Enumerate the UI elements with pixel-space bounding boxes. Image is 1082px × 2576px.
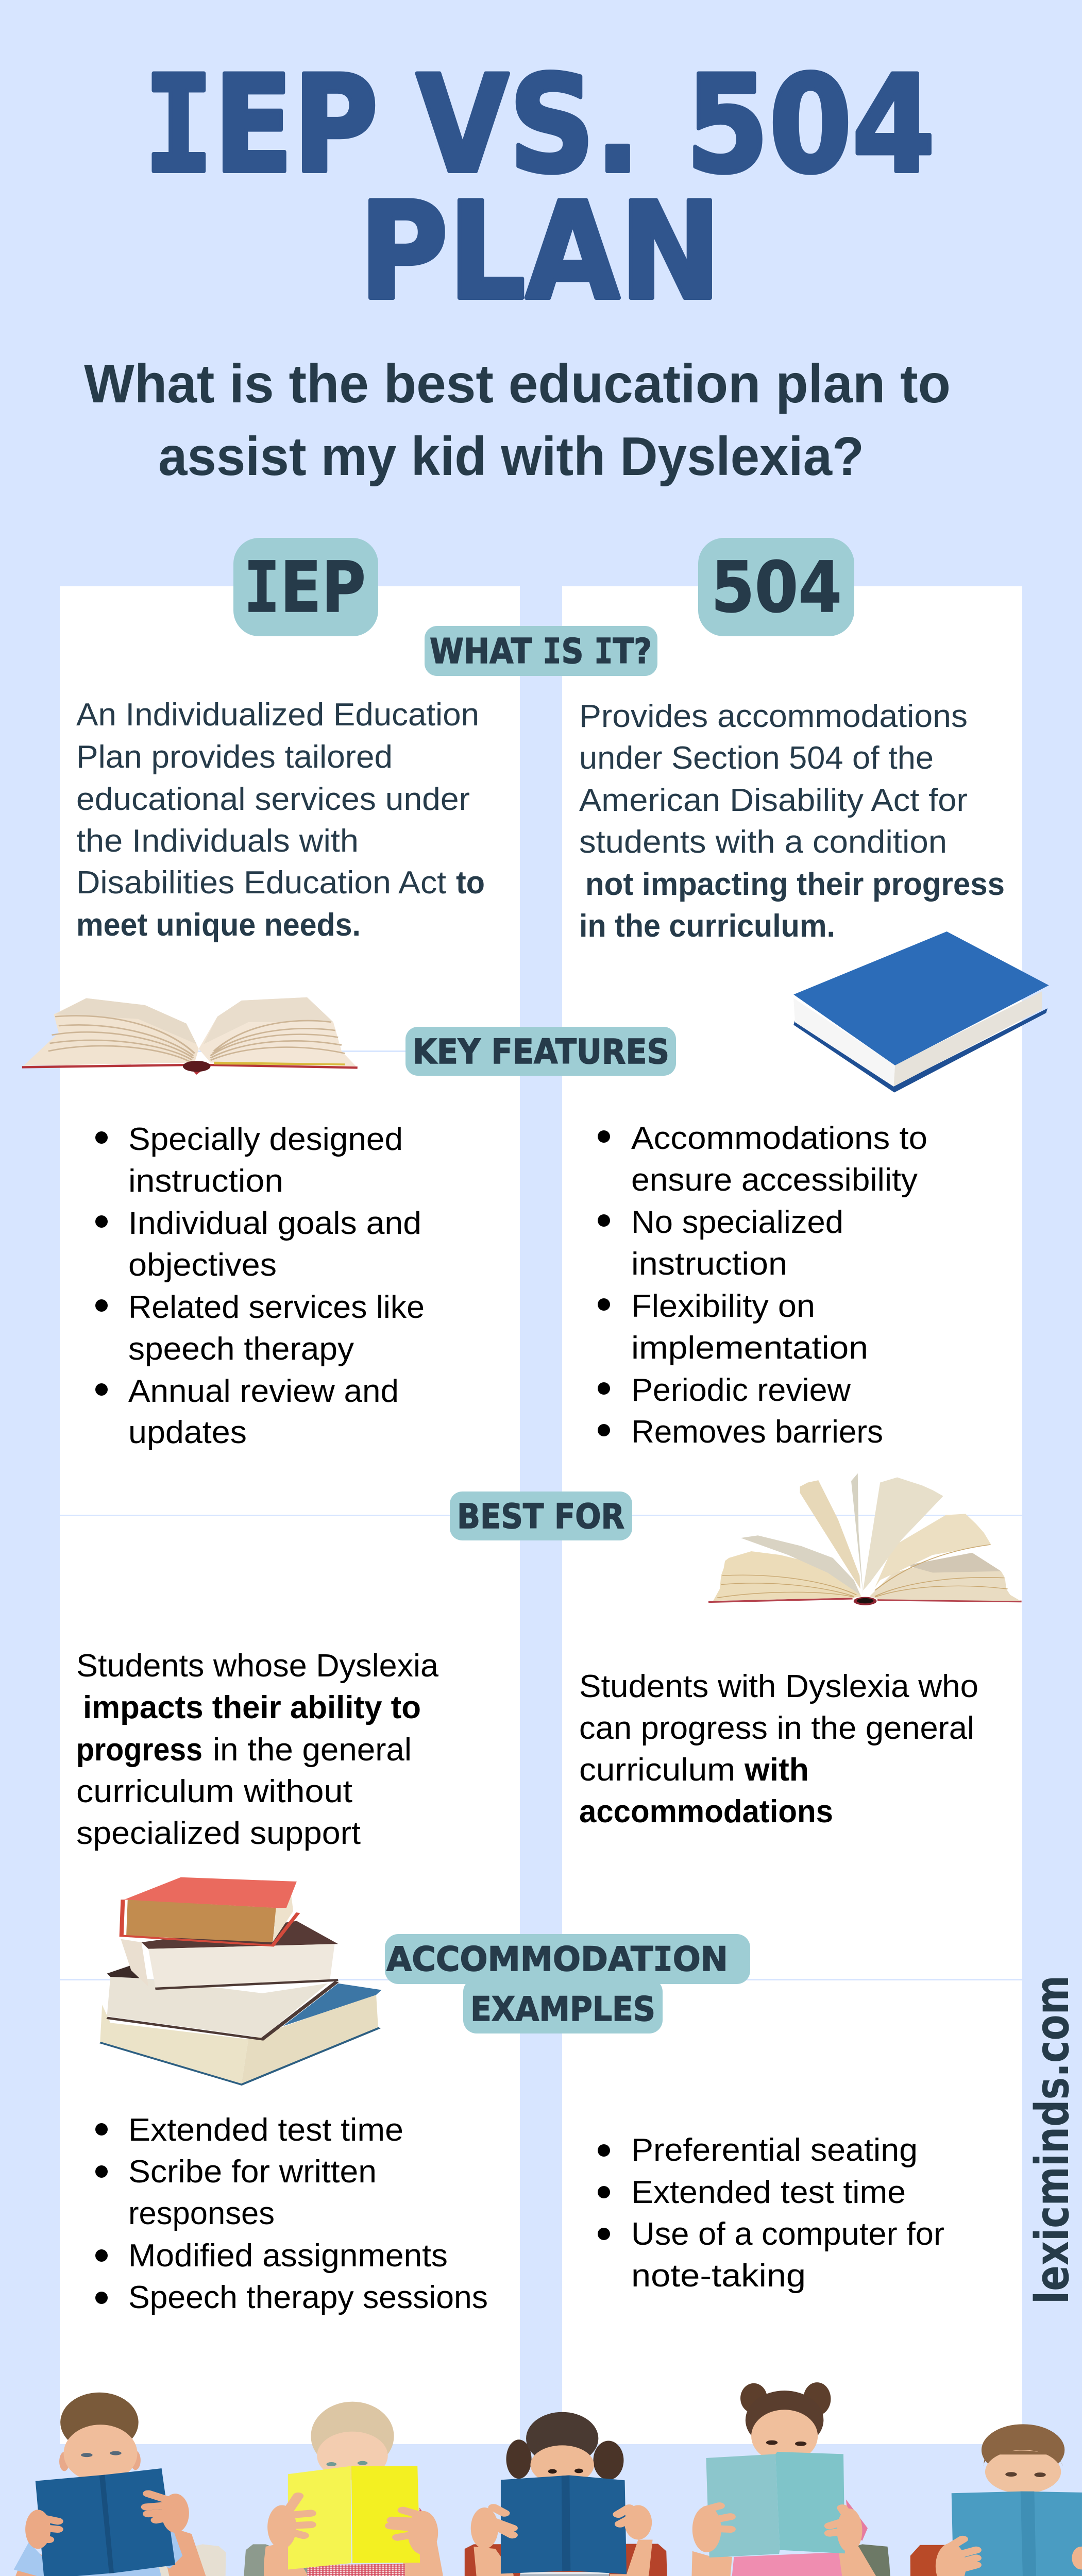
text block: 504 best for: Students with Dyslexia who bbox=[579, 1669, 978, 1704]
text block: 504 best for: can progress in the general bbox=[579, 1710, 974, 1746]
text block: IEP definition bbox=[76, 697, 485, 943]
bullet list: IEP accommodations: Modified assignments bbox=[128, 2238, 448, 2274]
column heading: IEP: IEP bbox=[244, 547, 366, 629]
text block: 504 definition: under Section 504 of the bbox=[579, 740, 934, 776]
bullet list: 504 key features: Flexibility on bbox=[631, 1289, 815, 1324]
photo: girl with pigtails and blue book bbox=[454, 2412, 677, 2576]
bullet list: 504 accommodations bbox=[598, 2132, 944, 2294]
title: IEP bbox=[144, 47, 378, 203]
bullet list: IEP accommodations bbox=[95, 2112, 488, 2315]
text block: 504 definition: not impacting their progress bbox=[585, 867, 1005, 902]
photo: boy with dark blue book bbox=[0, 2393, 226, 2576]
website credit: lexicminds.com bbox=[1025, 1975, 1079, 2304]
bullet list: IEP accommodations: Speech therapy sessions bbox=[128, 2280, 488, 2315]
title: 504 bbox=[686, 47, 935, 203]
title: VS. bbox=[416, 47, 640, 203]
bullet list: IEP key features: Specially designed bbox=[128, 1122, 403, 1157]
section label: accommodation examples: ACCOMMODATION bbox=[386, 1940, 728, 1979]
bullet list: IEP accommodations: Extended test time bbox=[128, 2112, 403, 2148]
subtitle bbox=[84, 353, 951, 487]
image: open book with fanned pages bbox=[708, 1473, 1022, 1605]
image: stack of books bbox=[100, 1877, 382, 2084]
text block: IEP best for: in the general bbox=[213, 1732, 412, 1768]
bullet list: IEP key features: Related services like bbox=[128, 1290, 425, 1325]
text block: IEP best for: curriculum without bbox=[76, 1774, 352, 1809]
title: PLAN bbox=[359, 174, 721, 330]
bullet list: IEP key features: objectives bbox=[128, 1247, 277, 1283]
text block: IEP definition: meet unique needs. bbox=[76, 907, 361, 943]
bullet list: 504 accommodations: Preferential seating bbox=[631, 2132, 918, 2168]
bullet list: IEP accommodations: Scribe for written bbox=[128, 2154, 377, 2190]
bullet list: IEP accommodations: responses bbox=[128, 2196, 275, 2231]
bullet list: 504 accommodations: Use of a computer for bbox=[631, 2216, 944, 2252]
text block: IEP best for: progress bbox=[76, 1732, 202, 1768]
subtitle: What is the best education plan to bbox=[84, 353, 951, 414]
text block: IEP best for: impacts their ability to bbox=[83, 1690, 421, 1725]
bullet list: 504 key features: implementation bbox=[631, 1330, 868, 1366]
panel: IEP column bbox=[60, 586, 520, 2444]
bullet list: 504 key features bbox=[598, 1121, 927, 1450]
text block: 504 definition: Provides accommodations bbox=[579, 699, 968, 734]
text block: 504 best for: curriculum bbox=[579, 1752, 735, 1788]
bullet list: IEP key features bbox=[95, 1122, 425, 1450]
bullet list: 504 key features: ensure accessibility bbox=[631, 1162, 918, 1198]
bullet list: 504 key features: Accommodations to bbox=[631, 1121, 927, 1156]
photo: boy with light blue book bbox=[910, 2424, 1082, 2576]
text block: IEP definition: to bbox=[456, 865, 485, 901]
text block: IEP best for: specialized support bbox=[76, 1816, 361, 1851]
bullet list: IEP key features: speech therapy bbox=[128, 1331, 354, 1367]
bullet list: 504 key features: instruction bbox=[631, 1246, 787, 1282]
bullet list: IEP key features: instruction bbox=[128, 1163, 283, 1199]
bullet list: 504 accommodations: Extended test time bbox=[631, 2175, 906, 2210]
section label: accommodation examples: EXAMPLES bbox=[470, 1990, 655, 2029]
photo: girl with yellow book bbox=[236, 2402, 446, 2576]
text block: IEP definition: the Individuals with bbox=[76, 823, 359, 859]
bullet list: 504 key features: Removes barriers bbox=[631, 1414, 883, 1450]
bullet list: IEP key features: updates bbox=[128, 1415, 247, 1450]
bullet list: IEP key features: Individual goals and bbox=[128, 1206, 421, 1241]
text block: IEP definition: educational services under bbox=[76, 782, 470, 817]
text block: 504 best for: with bbox=[744, 1752, 809, 1788]
image: blue closed book bbox=[793, 931, 1049, 1093]
text block: IEP best for bbox=[76, 1648, 439, 1851]
subtitle: assist my kid with Dyslexia? bbox=[158, 426, 864, 487]
text block: 504 best for bbox=[579, 1669, 978, 1829]
section label: what is it: WHAT IS IT? bbox=[430, 631, 652, 671]
panel: 504 column bbox=[562, 586, 1022, 2444]
text block: 504 definition: American Disability Act for bbox=[579, 783, 968, 818]
bullet list: 504 key features: Periodic review bbox=[631, 1372, 851, 1408]
section label: accommodation examples bbox=[385, 1934, 750, 2033]
bullet list: IEP key features: Annual review and bbox=[128, 1374, 399, 1409]
section label: best for: BEST FOR bbox=[457, 1497, 624, 1536]
text block: IEP best for: Students whose Dyslexia bbox=[76, 1648, 439, 1684]
photo: girl with hair buns and teal book bbox=[688, 2382, 899, 2576]
text block: IEP definition: Disabilities Education Act bbox=[76, 865, 446, 901]
section label: key features: KEY FEATURES bbox=[413, 1032, 669, 1072]
bullet list: 504 accommodations: note-taking bbox=[631, 2258, 806, 2294]
text block: 504 definition: in the curriculum. bbox=[579, 908, 835, 944]
image: open book left bbox=[22, 997, 358, 1073]
column heading: 504: 504 bbox=[711, 547, 842, 629]
bullet list: 504 key features: No specialized bbox=[631, 1205, 843, 1240]
text block: 504 best for: accommodations bbox=[579, 1794, 833, 1829]
text block: 504 definition bbox=[579, 699, 1005, 944]
text block: 504 definition: students with a condition bbox=[579, 824, 947, 860]
text block: IEP definition: An Individualized Education bbox=[76, 697, 479, 733]
title bbox=[144, 47, 935, 330]
text block: IEP definition: Plan provides tailored bbox=[76, 739, 393, 775]
